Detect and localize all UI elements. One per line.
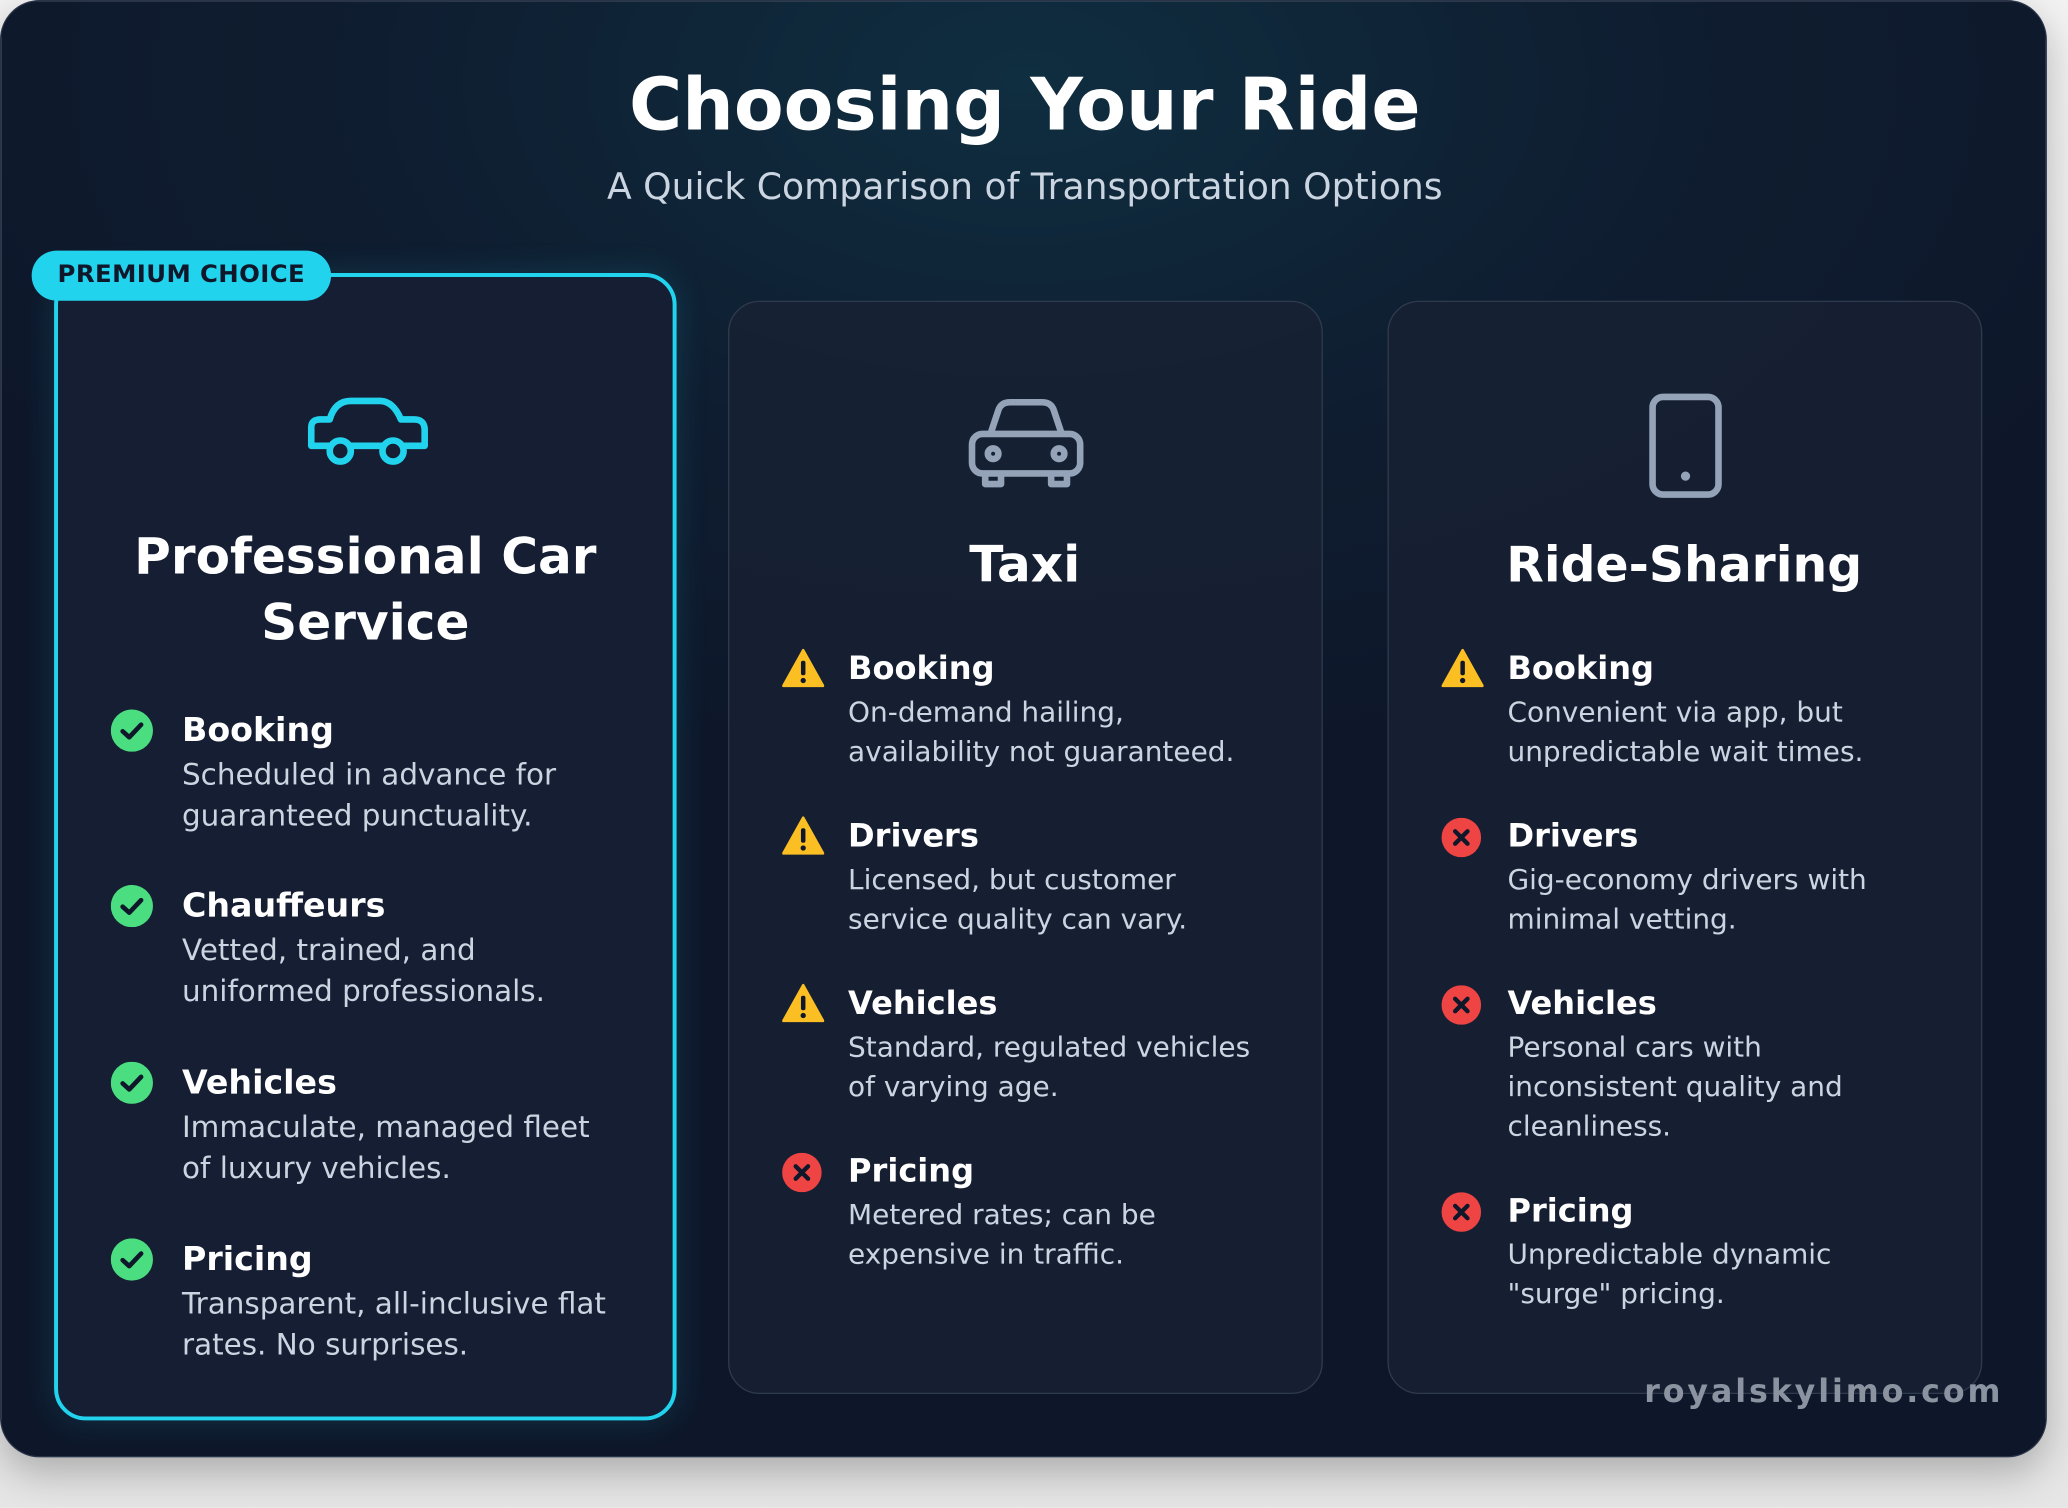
item: booking: Scheduled in advance for (182, 758, 556, 793)
panel: ride-sharing (1387, 301, 1982, 1394)
item: vehicles: inconsistent quality and (1507, 1070, 1843, 1103)
item: chauffeurs: uniformed professionals. (182, 975, 545, 1009)
item: vehicles: Standard, regulated vehicles (848, 1030, 1250, 1063)
item: booking (1442, 648, 1863, 768)
item: drivers: minimal vetting. (1507, 902, 1737, 935)
item: vehicles (782, 984, 1250, 1103)
item: pricing (110, 1238, 606, 1362)
panel: professional car service (54, 273, 677, 1420)
item: pricing: "surge" pricing. (1507, 1277, 1725, 1310)
item: vehicles: Personal cars with (1507, 1030, 1762, 1063)
item: pricing: Metered rates; can be (848, 1198, 1156, 1231)
item: pricing: Unpredictable dynamic (1507, 1237, 1831, 1270)
item: booking: guaranteed punctuality. (182, 799, 533, 834)
item: pricing: Pricing (182, 1240, 313, 1278)
item: pricing: rates. No surprises. (182, 1328, 468, 1362)
item: drivers (1442, 816, 1867, 935)
card title: Professional Car (134, 528, 597, 586)
item: chauffeurs: Chauffeurs (182, 886, 385, 925)
item: drivers: Drivers (1507, 816, 1638, 855)
item: drivers (782, 816, 1187, 935)
item: drivers: Gig-economy drivers with (1507, 863, 1867, 896)
badge: premium choice: PREMIUM CHOICE (58, 261, 305, 289)
icon: car (308, 398, 428, 465)
icon: phone (1649, 394, 1722, 498)
subtitle: A Quick Comparison of Transportation Options (607, 167, 1443, 208)
panel: taxi (728, 301, 1323, 1394)
item: booking: Booking (1507, 649, 1654, 687)
icon: taxi (968, 399, 1084, 488)
item: pricing (782, 1151, 1156, 1270)
item: pricing: Transparent, all-inclusive flat (182, 1287, 606, 1322)
card title: Ride-Sharing (1506, 537, 1862, 593)
item: booking: Convenient via app, but (1507, 695, 1843, 728)
item: drivers: Licensed, but customer (848, 863, 1176, 896)
item: drivers: Drivers (848, 816, 979, 855)
watermark: royalskylimo.com (1644, 1373, 2003, 1410)
item: booking: availability not guaranteed. (848, 735, 1234, 768)
item: booking: Booking (182, 711, 334, 749)
item: booking: Booking (848, 649, 995, 687)
item: pricing (1442, 1191, 1831, 1310)
item: vehicles: Vehicles (182, 1063, 337, 1101)
item: pricing: Pricing (848, 1151, 974, 1190)
item: booking: On-demand hailing, (848, 695, 1124, 728)
item: drivers: service quality can vary. (848, 902, 1187, 935)
item: vehicles: of luxury vehicles. (182, 1151, 451, 1186)
item: booking (110, 710, 556, 834)
item: pricing: Pricing (1507, 1191, 1633, 1229)
item: vehicles (1442, 984, 1843, 1142)
badge: premium choice (32, 251, 331, 301)
item: chauffeurs (110, 885, 545, 1009)
item: booking (782, 648, 1234, 768)
item: vehicles: Vehicles (1507, 984, 1657, 1022)
item: booking: unpredictable wait times. (1507, 735, 1863, 768)
card title: Taxi (969, 535, 1080, 593)
item: vehicles: cleanliness. (1507, 1109, 1671, 1142)
item: vehicles (110, 1062, 590, 1186)
item: vehicles: Vehicles (848, 984, 997, 1022)
item: vehicles: of varying age. (848, 1070, 1059, 1103)
item: chauffeurs: Vetted, trained, and (182, 934, 476, 968)
title: Choosing Your Ride (629, 62, 1421, 146)
item: pricing: expensive in traffic. (848, 1237, 1124, 1270)
card title (134, 528, 597, 652)
card title: Service (261, 593, 470, 652)
item: vehicles: Immaculate, managed fleet (182, 1110, 590, 1145)
